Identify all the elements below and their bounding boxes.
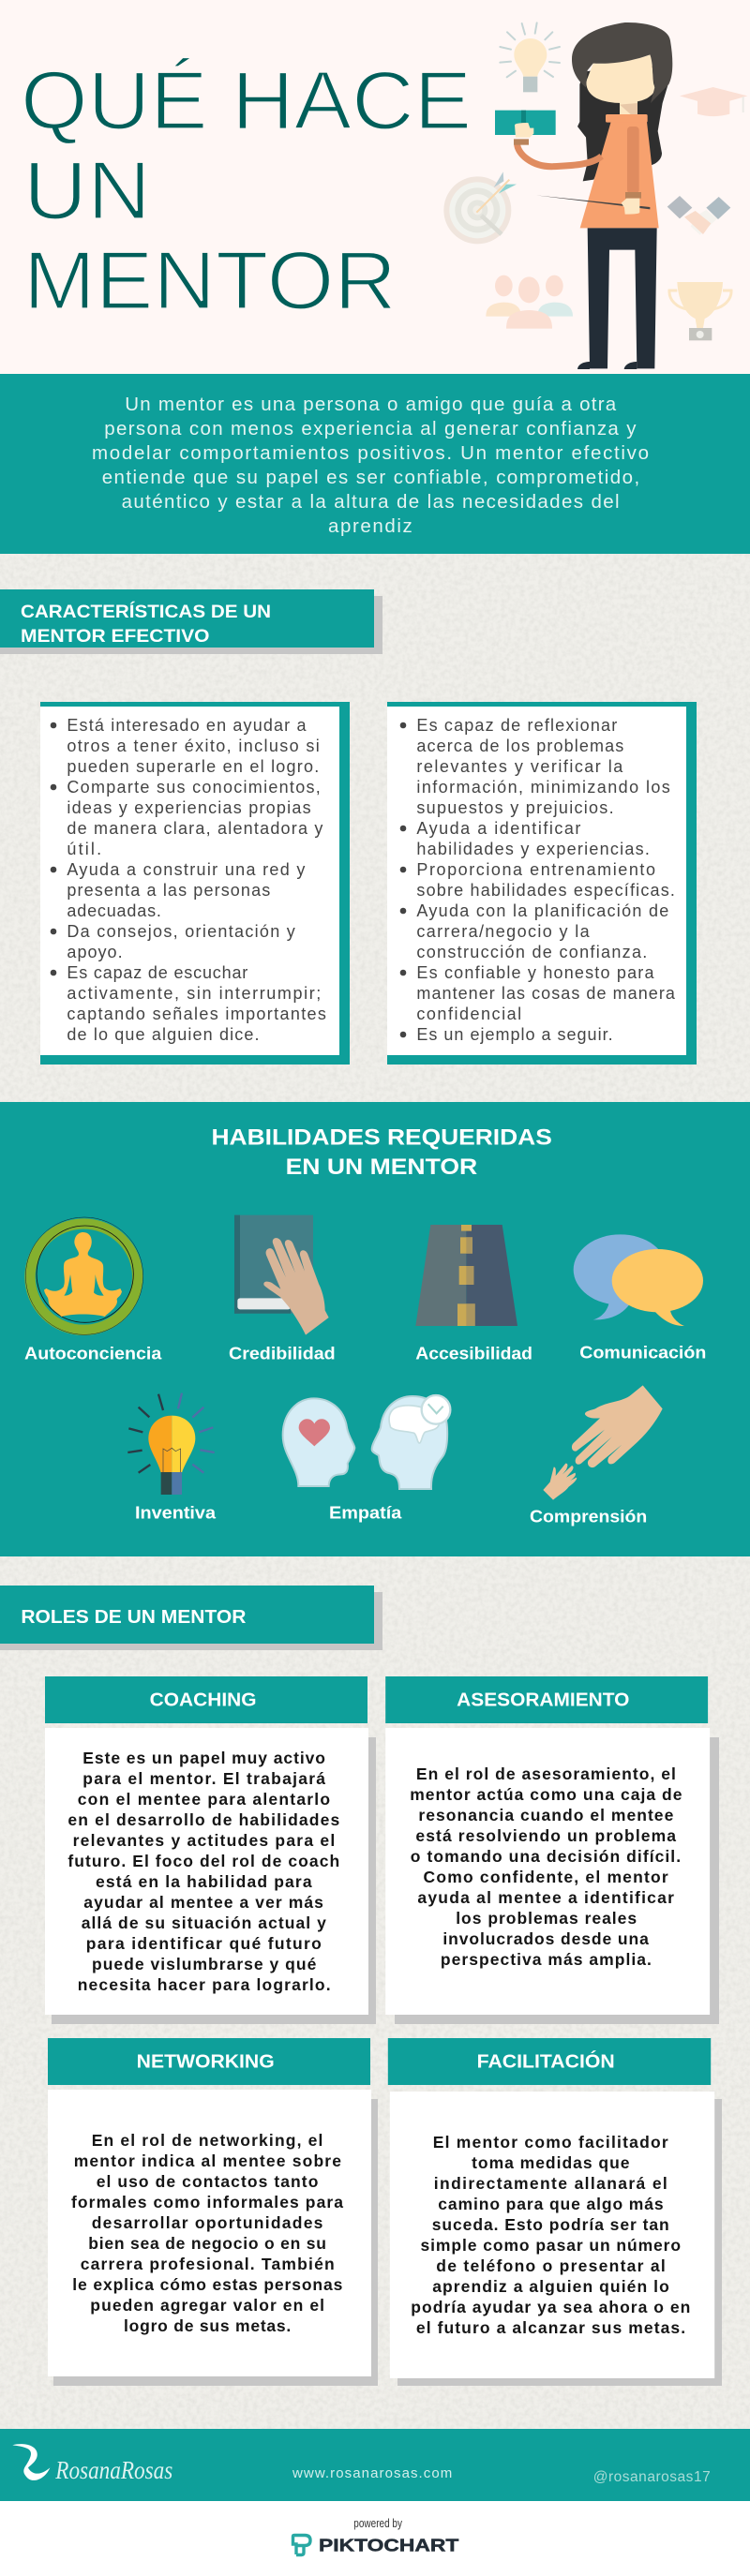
- section heading: habilidades: EN UN MENTOR: [286, 1154, 477, 1180]
- card text: suceda. Esto podría ser tan: [432, 2215, 669, 2234]
- title: UN: [23, 144, 151, 236]
- card text: allá de su situación actual y: [82, 1913, 326, 1932]
- card text: el futuro a alcanzar sus metas.: [416, 2318, 685, 2337]
- card heading: COACHING: [150, 1690, 257, 1711]
- bullet list: relevantes y verificar la: [416, 757, 623, 776]
- card text: aprendiz a alguien quién lo: [432, 2277, 669, 2296]
- panel: networking: [48, 2038, 378, 2386]
- bullet list: información, minimizando los: [416, 778, 670, 797]
- card text: está en la habilidad para: [96, 1872, 312, 1891]
- section heading: características: CARACTERÍSTICAS DE UN: [21, 601, 271, 622]
- card text: bien sea de negocio o en su: [88, 2234, 326, 2253]
- card text: puede vislumbrarse y qué: [92, 1955, 317, 1973]
- icon: idea bulb: [128, 1393, 215, 1495]
- card text: perspectiva más amplia.: [441, 1950, 652, 1969]
- intro text: modelar comportamientos positivos. Un mentor efectivo: [92, 442, 649, 464]
- bullet list: captando señales importantes: [67, 1005, 326, 1023]
- bullet list: [400, 716, 676, 1044]
- bullet list: habilidades y experiencias.: [416, 840, 650, 858]
- label: Comprensión: [530, 1508, 647, 1526]
- card text: En el rol de asesoramiento, el: [416, 1764, 676, 1783]
- bullet list: acerca de los problemas: [416, 737, 623, 755]
- card text: los problemas reales: [456, 1909, 637, 1928]
- logo: Rosana Rosas: RosanaRosas: [54, 2456, 172, 2484]
- card text: involucrados desde una: [442, 1929, 649, 1948]
- panel: asesoramiento: [385, 1676, 719, 2024]
- panel: facilitación: [388, 2038, 722, 2386]
- card text: necesita hacer para lograrlo.: [78, 1975, 331, 1994]
- card heading: [385, 1676, 708, 1723]
- card text: pueden agregar valor en el: [90, 2296, 324, 2315]
- intro text: auténtico y estar a la altura de las necesidades del: [122, 491, 620, 513]
- bullet list: carrera/negocio y la: [416, 922, 591, 941]
- label: Inventiva: [135, 1504, 217, 1523]
- bullet list: presenta a las personas: [67, 881, 270, 900]
- bullet list: [51, 716, 326, 1044]
- card text: [71, 2131, 343, 2335]
- bullet list: Ayuda a identificar: [416, 819, 580, 838]
- intro band: [0, 374, 750, 554]
- bullet list: adecuadas.: [67, 901, 161, 920]
- bullet list: Es capaz de escuchar: [67, 963, 248, 982]
- bullet list: Ayuda con la planificación de: [416, 901, 668, 920]
- bullet list: útil.: [67, 840, 101, 858]
- intro text: aprendiz: [328, 515, 412, 537]
- bullet list: otros a tener éxito, incluso si: [67, 737, 320, 755]
- card heading: [45, 1676, 368, 1723]
- icon: graduation cap: [680, 87, 747, 116]
- card text: En el rol de networking, el: [92, 2131, 322, 2150]
- icon: target with arrow: [443, 171, 517, 244]
- panel: habilidades: [0, 1102, 750, 1556]
- card text: relevantes y actitudes para el: [73, 1831, 335, 1850]
- card text: el uso de contactos tanto: [97, 2172, 318, 2191]
- page background texture: [0, 374, 750, 2429]
- bullet list: Es confiable y honesto para: [416, 963, 654, 982]
- social handle: @rosanarosas17: [593, 2469, 711, 2485]
- panel: characteristics right: [387, 702, 697, 1065]
- section heading: características: MENTOR EFECTIVO: [21, 626, 210, 647]
- card text: Este es un papel muy activo: [82, 1749, 325, 1767]
- piktochart credit: [0, 2501, 750, 2576]
- card text: camino para que algo más: [438, 2195, 664, 2213]
- card text: mentor indica al mentee sobre: [74, 2152, 341, 2170]
- website: www.rosanarosas.com: [292, 2465, 452, 2481]
- icon: group of people: [486, 275, 573, 329]
- icon: meditation: [25, 1217, 143, 1334]
- card text: con el mentee para alentarlo: [78, 1790, 330, 1809]
- intro text: entiende que su papel es ser confiable, comprometido,: [102, 467, 639, 488]
- card text: [68, 1749, 339, 1994]
- section heading: roles: ROLES DE UN MENTOR: [21, 1607, 247, 1628]
- icon: heads with heart and thought: [283, 1395, 450, 1489]
- label: Credibilidad: [229, 1345, 336, 1363]
- card text: logro de sus metas.: [124, 2316, 291, 2335]
- header panel: [0, 0, 750, 374]
- bullet list: Proporciona entrenamiento: [416, 860, 655, 879]
- card heading: [388, 2038, 711, 2085]
- title: MENTOR: [23, 234, 397, 326]
- section heading: habilidades: HABILIDADES REQUERIDAS: [212, 1125, 552, 1151]
- panel: coaching: [45, 1676, 376, 2024]
- logo: piktochart mark: [292, 2536, 310, 2554]
- bullet list: ideas y experiencias propias: [67, 798, 311, 817]
- label: Autoconciencia: [24, 1345, 162, 1363]
- card text: El mentor como facilitador: [433, 2133, 668, 2152]
- panel: characteristics left: [40, 702, 350, 1065]
- bullet list: construcción de confianza.: [416, 943, 647, 961]
- label: Comunicación: [579, 1344, 706, 1362]
- card text: [411, 2133, 690, 2337]
- bullet list: de manera clara, alentadora y: [67, 819, 322, 838]
- label: Accesibilidad: [415, 1345, 532, 1363]
- title: QUÉ HACE: [21, 54, 472, 146]
- card text: formales como informales para: [71, 2193, 343, 2211]
- card text: para el mentor. El trabajará: [82, 1769, 325, 1788]
- card text: carrera profesional. También: [81, 2255, 335, 2273]
- icon: hand on book: [234, 1215, 329, 1335]
- bullet list: Da consejos, orientación y: [67, 922, 295, 941]
- logo: Rosana Rosas: [12, 2444, 172, 2484]
- bullet list: Está interesado en ayudar a: [67, 716, 307, 735]
- card text: de teléfono o presentar al: [436, 2256, 666, 2275]
- card text: futuro. El foco del rol de coach: [68, 1852, 339, 1870]
- card text: para identificar qué futuro: [86, 1934, 322, 1953]
- bullet list: activamente, sin interrumpir;: [67, 984, 321, 1003]
- card text: podría ayudar ya sea ahora o en: [411, 2298, 690, 2316]
- icon: trophy: [669, 282, 731, 340]
- intro text: persona con menos experiencia al generar confianza y: [104, 418, 637, 439]
- icon: road: [415, 1225, 518, 1326]
- bullet list: Es capaz de reflexionar: [416, 716, 617, 735]
- section heading: habilidades: [212, 1125, 552, 1180]
- bullet list: de lo que alguien dice.: [67, 1025, 260, 1044]
- section heading: roles: [0, 1586, 382, 1650]
- card text: mentor actúa como una caja de: [410, 1785, 682, 1804]
- icon: handshake: [668, 196, 730, 235]
- bullet list: Comparte sus conocimientos,: [67, 778, 321, 797]
- card text: ayuda al mentee a identificar: [417, 1888, 674, 1907]
- card text: [410, 1764, 682, 1969]
- bullet list: mantener las cosas de manera: [416, 984, 676, 1003]
- card text: toma medidas que: [472, 2153, 630, 2172]
- illustration: mentor woman with icons: [443, 22, 747, 369]
- bullet list: sobre habilidades específicas.: [416, 881, 675, 900]
- bullet list: Es un ejemplo a seguir.: [416, 1025, 613, 1044]
- figure: woman: [495, 22, 672, 369]
- title: [21, 54, 472, 326]
- card text: ayudar al mentee a ver más: [83, 1893, 323, 1912]
- card text: o tomando una decisión difícil.: [411, 1847, 681, 1866]
- icon: helping hands: [543, 1385, 663, 1500]
- footer band: [0, 2429, 750, 2501]
- card text: está resolviendo un problema: [415, 1826, 676, 1845]
- card heading: NETWORKING: [137, 2052, 275, 2073]
- icon: light bulb: [500, 22, 560, 92]
- powered by: powered by: [353, 2516, 402, 2530]
- card text: resonancia cuando el mentee: [418, 1806, 674, 1824]
- icon: speech bubbles: [574, 1234, 703, 1326]
- bullet list: apoyo.: [67, 943, 123, 961]
- intro text: Un mentor es una persona o amigo que guía a otra: [125, 394, 617, 415]
- label: Empatía: [329, 1504, 402, 1523]
- card text: en el desarrollo de habilidades: [68, 1810, 339, 1829]
- bullet list: supuestos y prejuicios.: [416, 798, 614, 817]
- bullet list: pueden superarle en el logro.: [67, 757, 319, 776]
- card text: Como confidente, el mentor: [424, 1868, 668, 1886]
- bullet list: Ayuda a construir una red y: [67, 860, 305, 879]
- card text: le explica cómo estas personas: [72, 2275, 343, 2294]
- card heading: FACILITACIÓN: [477, 2050, 615, 2073]
- intro text: [92, 394, 649, 537]
- logo: piktochart wordmark: PIKTOCHART: [319, 2536, 459, 2555]
- card text: desarrollar oportunidades: [92, 2213, 323, 2232]
- section heading: características: [0, 589, 382, 654]
- card text: simple como pasar un número: [420, 2236, 681, 2255]
- bullet list: confidencial: [416, 1005, 521, 1023]
- card text: indirectamente allanará el: [434, 2174, 668, 2193]
- card heading: ASESORAMIENTO: [457, 1690, 629, 1711]
- card heading: [48, 2038, 370, 2085]
